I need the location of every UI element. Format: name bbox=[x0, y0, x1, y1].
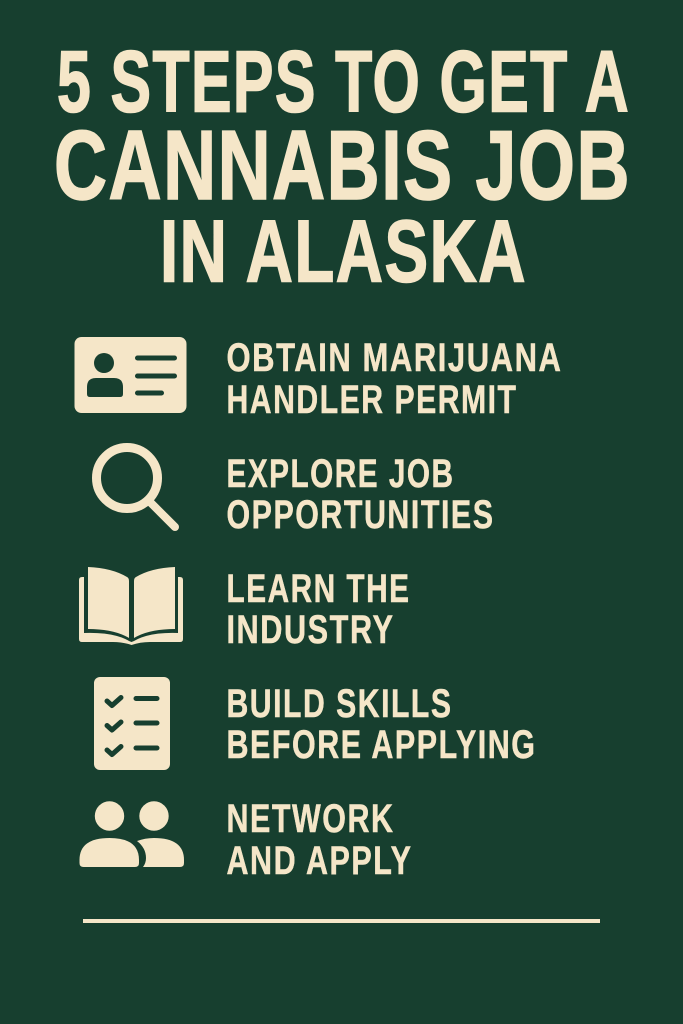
step 4 text: BEFORE APPLYING bbox=[226, 723, 536, 767]
step 2 text: EXPLORE JOB bbox=[226, 452, 454, 496]
step 3 text: INDUSTRY bbox=[226, 608, 394, 652]
step 5: network and apply bbox=[80, 797, 412, 883]
title bbox=[54, 34, 631, 300]
step 1: obtain permit bbox=[74, 336, 562, 422]
step 2 text bbox=[226, 452, 494, 537]
bottom divider line bbox=[83, 919, 600, 923]
step 4: build skills bbox=[94, 677, 536, 770]
icon: two people bbox=[80, 801, 184, 867]
step 2: explore jobs bbox=[96, 448, 494, 537]
step 1 text: OBTAIN MARIJUANA bbox=[226, 336, 562, 380]
step 1 text: HANDLER PERMIT bbox=[226, 378, 518, 422]
title: IN ALASKA bbox=[160, 202, 527, 300]
step 3 text: LEARN THE bbox=[226, 567, 410, 611]
icon: magnifying glass bbox=[96, 448, 175, 527]
icon: ID card bbox=[74, 337, 186, 413]
step 2 text: OPPORTUNITIES bbox=[226, 493, 494, 537]
icon: checklist bbox=[94, 677, 170, 770]
step 3: learn the industry bbox=[79, 567, 410, 652]
step 4 text: BUILD SKILLS bbox=[226, 682, 452, 726]
step 5 text: AND APPLY bbox=[226, 839, 412, 883]
icon: open book bbox=[79, 567, 183, 645]
step 3 text bbox=[226, 567, 410, 652]
step 1 text bbox=[226, 336, 562, 422]
step 5 text: NETWORK bbox=[226, 797, 394, 841]
step 5 text bbox=[226, 797, 412, 883]
step 4 text bbox=[226, 682, 536, 767]
